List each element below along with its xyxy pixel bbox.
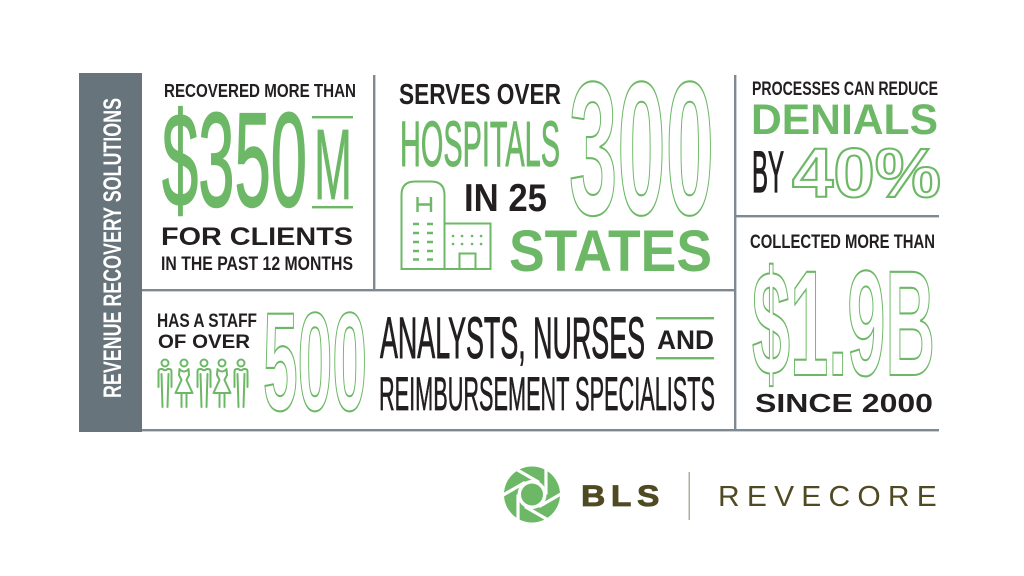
icon: shutter mark: [499, 464, 565, 525]
wordmark: Revecore: REVECORE: [718, 481, 944, 513]
wordmark: BLS: BLS: [581, 480, 665, 513]
panel: collected 1.9B: [750, 232, 935, 418]
text: serves over: SERVES OVER: [399, 79, 561, 111]
text: denials: DENIALS: [751, 96, 938, 144]
text: processes can reduce: PROCESSES CAN REDUCE: [752, 78, 938, 100]
text: and with rules: [656, 317, 714, 359]
text: in 25: IN 25: [464, 177, 547, 220]
panel: recovered 350M: $350: [162, 86, 307, 235]
panel: staff of 500: 500: [263, 283, 367, 440]
panel: staff of 500: [157, 283, 715, 440]
unit: M with rules: [312, 109, 353, 221]
icon: hospital: [402, 182, 490, 269]
panel: recovered 350M: [161, 80, 356, 275]
text: collected more than: COLLECTED MORE THAN: [750, 232, 935, 253]
text: for clients: FOR CLIENTS: [161, 223, 353, 251]
panel: serves 300 hospitals: HOSPITALS: [400, 108, 560, 180]
text: recovered more than: RECOVERED MORE THAN: [164, 80, 356, 101]
text: and with rules: AND: [657, 325, 714, 355]
text: has a staff: HAS A STAFF: [157, 310, 257, 332]
panel: denials by 40%: BY: [752, 140, 784, 205]
text: 300: [569, 43, 714, 255]
icon: people: [158, 360, 248, 407]
panel: staff of 500: ANALYSTS, NURSES: [380, 306, 645, 371]
text: since 2000: SINCE 2000: [755, 388, 933, 418]
text: states: STATES: [509, 219, 712, 284]
number: 40% outline: 40%: [792, 134, 941, 212]
panel: serves 300 hospitals: [399, 43, 714, 284]
text: of over: OF OVER: [158, 331, 250, 353]
sidebar: revenue recovery solutions: [79, 73, 142, 432]
panel: denials by 40%: [751, 78, 941, 212]
text: in the past 12 months: IN THE PAST 12 MONTHS: [161, 254, 353, 275]
logo: BLS Revecore: [499, 464, 944, 525]
panel: recovered 350M: M: [314, 109, 352, 221]
